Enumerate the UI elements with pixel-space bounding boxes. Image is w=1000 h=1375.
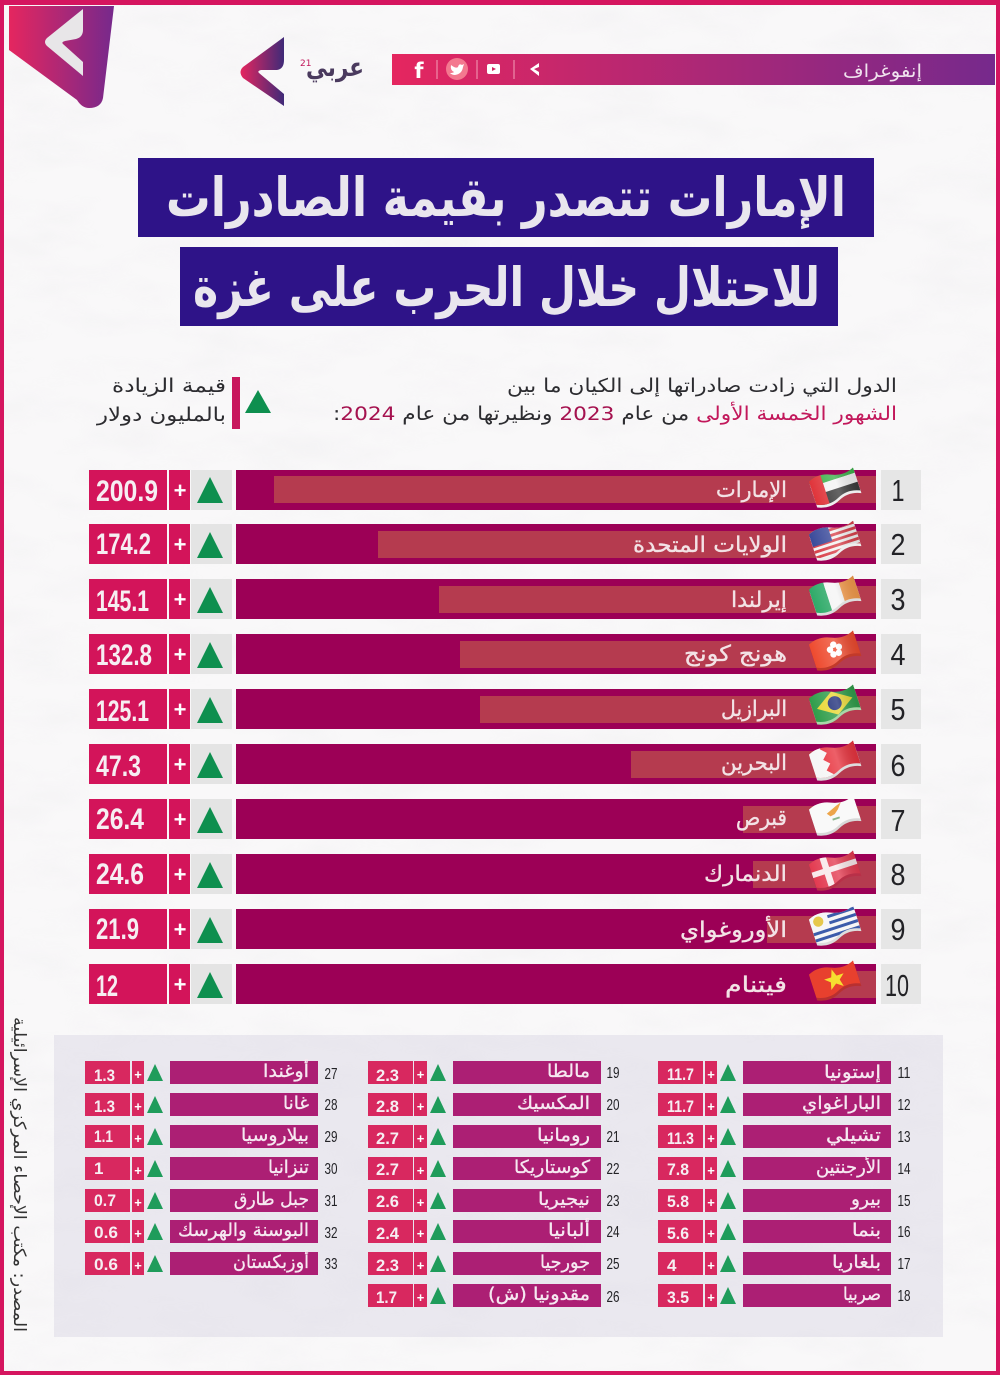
row 23: 2.6 [376,1192,399,1211]
row 18: 3.5 [667,1288,689,1307]
row 10 Vietnam [89,960,921,1004]
row 25 [368,1252,620,1275]
row 19: 19 [606,1065,620,1082]
row 31: جبل طارق [234,1189,309,1210]
row 12: 11.7 [667,1097,694,1116]
flag: USA [809,520,862,561]
row 9 Uruguay: 21.9 [96,913,139,946]
brand logo: 21 [300,59,311,69]
row 33: أوزبكستان [233,1250,309,1273]
row 22: كوستاريكا [514,1157,590,1178]
row 10 Vietnam: 10 [885,968,909,1003]
row 25: جورجيا [540,1252,590,1273]
row 32: البوسنة والهرسك [178,1220,309,1241]
row 22: + [417,1163,425,1178]
column 3 rows [85,1059,338,1275]
row 12: 12 [898,1097,911,1114]
row 15 [658,1189,911,1212]
row 2 USA: 2 [890,527,906,562]
row 21: + [417,1131,425,1146]
row 8 Denmark: 24.6 [96,858,144,891]
row 28: غانا [283,1093,309,1114]
brand logo [240,37,364,106]
row 9 Uruguay: 9 [890,912,906,947]
row 5 Brazil: + [174,697,186,722]
row 7 Cyprus [89,798,921,839]
row 18: + [707,1290,715,1305]
row 13: تشيلي [826,1125,881,1146]
row 3 Ireland: 3 [890,582,906,617]
row 16 [658,1220,911,1243]
row 9 Uruguay: + [174,917,186,942]
row 21: رومانيا [537,1125,590,1146]
legend: قيمة الزيادة [112,375,226,397]
row 15: 15 [898,1193,911,1210]
legend: بالمليون دولار [96,404,226,426]
row 7 Cyprus: + [174,807,186,832]
row 17: 17 [898,1256,911,1273]
row 10 Vietnam: 12 [96,970,118,1003]
title: الإمارات تتصدر بقيمة الصادرات [166,166,846,229]
row 8 Denmark: الدنمارك [704,862,787,887]
row 11: إستونيا [824,1062,881,1083]
row 29: 1.1 [94,1127,113,1146]
row 23: نيجيريا [538,1189,590,1210]
row 17: بلغاريا [832,1252,881,1273]
row 4 Hong Kong: + [174,642,186,667]
row 22: 2.7 [376,1160,399,1179]
icon: chevron [530,63,539,76]
row 8 Denmark [89,850,921,894]
row 19: + [417,1067,425,1082]
row 24: 2.4 [376,1224,400,1243]
flag: UAE [809,468,862,508]
row 31: 31 [324,1193,338,1210]
row 2 USA: 174.2 [96,528,151,561]
flag: Bahrain [809,740,862,781]
row 22 [368,1157,620,1180]
row 6 Bahrain [89,740,921,784]
intro text [333,375,897,425]
row 33: 0.6 [94,1255,118,1274]
row 24: 24 [606,1224,620,1241]
strip label: إنفوغراف [843,61,922,82]
row 21: 21 [606,1129,620,1146]
row 1 UAE: الإمارات [716,478,787,503]
row 13: 11.3 [667,1129,694,1148]
intro text: الدول التي زادت صادراتها إلى الكيان ما بين [507,375,897,398]
row 4 Hong Kong: 132.8 [96,639,152,672]
row 5 Brazil: 5 [890,692,906,727]
row 24: ألبانيا [548,1218,590,1241]
row 33: 33 [324,1256,338,1273]
row 26 [368,1284,620,1307]
row 7 Cyprus: قبرص [736,806,787,831]
row 21: 2.7 [376,1129,399,1148]
row 2 USA: الولايات المتحدة [633,533,787,558]
row 11: 11.7 [667,1065,694,1084]
row 28: 1.3 [94,1097,115,1116]
row 25: 25 [606,1256,620,1273]
row 20 [368,1093,620,1116]
flag: Ireland [809,576,862,616]
row 4 Hong Kong: هونج كونج [684,642,787,667]
row 33: + [134,1258,142,1273]
row 5 Brazil [89,684,921,729]
row 23 [368,1189,620,1212]
row 14: 7.8 [667,1160,689,1179]
icon: twitter [446,58,468,80]
row 4 Hong Kong: 4 [890,637,906,672]
row 30: 1 [94,1159,103,1178]
row 23: + [417,1195,425,1210]
row 26: 1.7 [376,1288,397,1307]
icon: facebook: f [414,59,424,83]
column 1 rows [658,1061,911,1307]
row 20: المكسيك [517,1093,590,1114]
row 6 Bahrain: البحرين [721,751,787,776]
flag: Uruguay [809,906,862,946]
row 30: + [134,1163,142,1178]
row 27 [85,1059,338,1085]
row 18 [658,1284,911,1307]
row 29: + [134,1131,142,1146]
row 3 Ireland [89,576,921,619]
row 27: أوغندا [263,1059,309,1082]
corner logo [9,6,114,108]
row 26: 26 [606,1289,620,1306]
row 15: + [707,1195,715,1210]
row 13 [658,1125,911,1148]
row 20: 2.8 [376,1097,399,1116]
row 6 Bahrain: 47.3 [96,750,141,783]
row 26: مقدونيا (ش) [488,1284,590,1305]
row 3 Ireland: إيرلندا [731,588,787,613]
title: للاحتلال خلال الحرب على غزة [193,256,820,319]
legend [96,375,271,429]
source: المصدر: مكتب الإحصاء المركزي الإسرائيلية [9,1017,29,1332]
row 24 [368,1218,620,1243]
row 11 [658,1061,911,1084]
row 4 Hong Kong [89,630,921,674]
row 16: 16 [898,1224,911,1241]
row 14 [658,1156,911,1180]
row 29 [85,1125,338,1148]
row 22: 22 [606,1161,620,1178]
row 6 Bahrain: 6 [890,748,906,783]
header strip [392,54,995,85]
row 16: بنما [852,1220,881,1241]
row 29: 29 [324,1129,338,1146]
row 17: + [707,1258,715,1273]
row 27: 1.3 [94,1066,115,1085]
row 26: + [417,1290,425,1305]
row 19: 2.3 [376,1066,399,1085]
row 1 UAE: 1 [892,473,904,508]
row 28: + [134,1099,142,1114]
flag: Cyprus [809,798,862,836]
row 13: 13 [898,1129,911,1146]
brand logo: عربي [306,53,364,83]
row 29: بيلاروسيا [241,1125,309,1146]
row 1 UAE [89,468,921,510]
flag: Denmark [809,850,861,891]
row 30: تنزانيا [268,1157,309,1178]
row 8 Denmark: + [174,862,186,887]
row 18: 18 [898,1288,911,1305]
row 2 USA: + [174,532,186,557]
row 21 [368,1125,620,1148]
row 31 [85,1189,338,1212]
row 23: 23 [606,1193,620,1210]
row 32: 0.6 [94,1223,118,1242]
row 1 UAE: 200.9 [96,475,158,508]
row 28 [85,1093,338,1116]
row 27: + [134,1067,142,1082]
row 14: الأرجنتين [816,1156,881,1178]
row 18: صربيا [843,1284,881,1305]
icon: youtube [487,64,500,74]
row 9 Uruguay [89,906,921,949]
row 6 Bahrain: + [174,752,186,777]
row 30 [85,1157,338,1180]
row 5 Brazil: البرازيل [721,697,787,722]
row 24: + [417,1226,425,1241]
row 14: 14 [898,1161,911,1178]
row 15: 5.8 [667,1192,689,1211]
row 25: + [417,1258,425,1273]
row 10 Vietnam: + [174,972,186,997]
row 8 Denmark: 8 [890,857,906,892]
row 1 UAE: + [174,478,186,503]
row 3 Ireland: 145.1 [96,585,149,618]
row 31: 0.7 [94,1191,116,1210]
flag: Vietnam [809,960,862,1001]
row 31: + [134,1195,142,1210]
row 19 [368,1061,620,1085]
row 17: 4 [667,1256,677,1275]
row 3 Ireland: + [174,587,186,612]
row 11: 11 [898,1065,911,1082]
row 27: 27 [324,1066,338,1083]
flag: Hong Kong [809,630,862,671]
title [138,158,874,326]
row 10 Vietnam: فيتنام [725,973,787,998]
row 12: الباراغواي [802,1093,881,1114]
row 11: + [707,1067,715,1082]
row 13: + [707,1131,715,1146]
row 32: 32 [324,1225,338,1242]
row 19: مالطا [547,1061,590,1082]
panel: remaining countries [54,1035,943,1337]
row 16: + [707,1226,715,1241]
row 25: 2.3 [376,1256,399,1275]
row 9 Uruguay: الأوروغواي [680,916,787,943]
flag: Brazil [809,684,862,725]
row 15: بيرو [850,1189,881,1210]
row 5 Brazil: 125.1 [96,695,149,728]
row 20: 20 [606,1097,620,1114]
column 2 rows [368,1061,620,1307]
row 2 USA [89,520,921,564]
row 12 [658,1093,911,1116]
row 33 [85,1250,338,1275]
intro text: الشهور الخمسة الأولى من عام 2023 ونظيرتها من عام 2024: [333,402,897,425]
row 32: + [134,1226,142,1241]
row 17 [658,1252,911,1275]
row 20: + [417,1099,425,1114]
row 30: 30 [324,1161,338,1178]
row 12: + [707,1099,715,1114]
row 7 Cyprus: 26.4 [96,803,144,836]
row 28: 28 [324,1097,338,1114]
row 7 Cyprus: 7 [890,803,906,838]
row 16: 5.6 [667,1224,689,1243]
row 32 [85,1220,338,1243]
row 14: + [707,1163,715,1178]
